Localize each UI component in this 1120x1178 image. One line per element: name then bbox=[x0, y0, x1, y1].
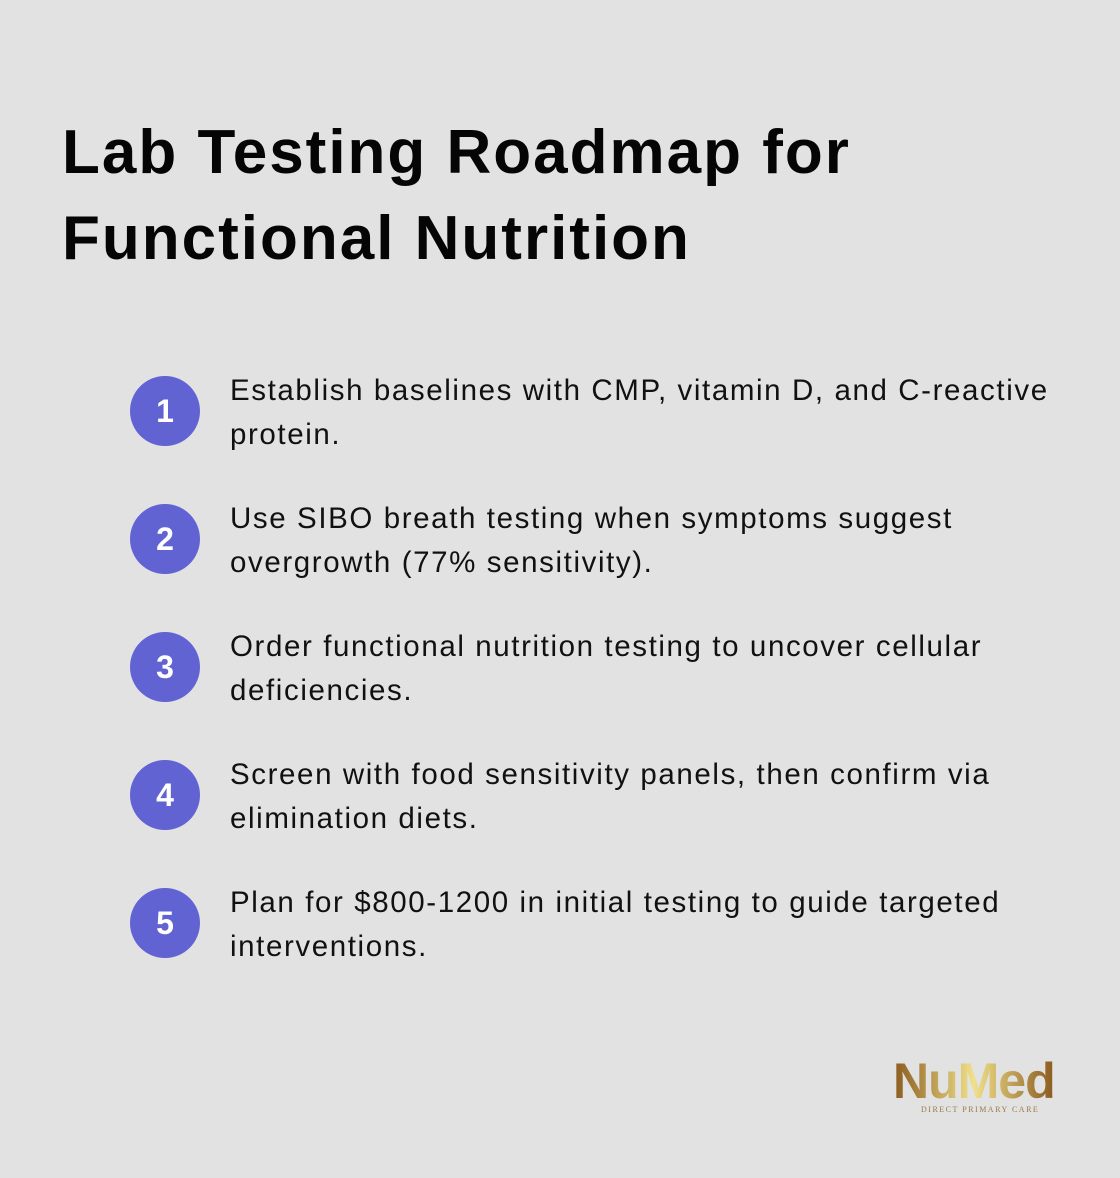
title: Functional Nutrition bbox=[62, 204, 691, 273]
logo: NuMed bbox=[893, 1053, 1055, 1109]
logo: DIRECT PRIMARY CARE bbox=[921, 1105, 1039, 1114]
step 1 bbox=[130, 374, 1049, 451]
step 3: 3 bbox=[156, 649, 174, 685]
step 1: 1 bbox=[156, 393, 174, 429]
title bbox=[62, 118, 851, 273]
step 2: Use SIBO breath testing when symptoms suggest bbox=[230, 502, 953, 535]
title: Lab Testing Roadmap for bbox=[62, 118, 851, 187]
step 4: 4 bbox=[156, 777, 174, 813]
step 1: protein. bbox=[230, 418, 341, 451]
step 5: 5 bbox=[156, 905, 174, 941]
step 2: 2 bbox=[156, 521, 174, 557]
step 1: Establish baselines with CMP, vitamin D, and C-reactive bbox=[230, 374, 1049, 407]
step 3: Order functional nutrition testing to uncover cellular bbox=[230, 630, 982, 663]
step 4: elimination diets. bbox=[230, 802, 479, 835]
step 4: Screen with food sensitivity panels, then confirm via bbox=[230, 758, 990, 791]
step 4 bbox=[130, 758, 990, 835]
step 5: interventions. bbox=[230, 930, 428, 963]
step 2 bbox=[130, 502, 953, 579]
step 5: Plan for $800-1200 in initial testing to guide targeted bbox=[230, 886, 1000, 919]
step 3 bbox=[130, 630, 982, 707]
step 2: overgrowth (77% sensitivity). bbox=[230, 546, 653, 579]
step 5 bbox=[130, 886, 1000, 963]
step 3: deficiencies. bbox=[230, 674, 413, 707]
